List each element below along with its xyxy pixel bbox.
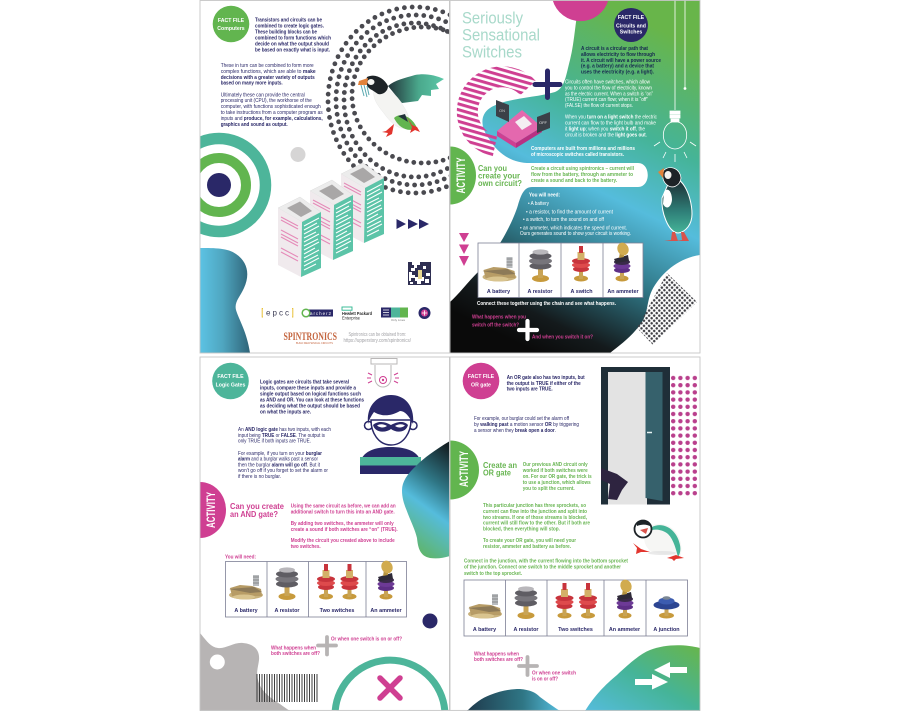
heading: can you create an AND gate [230,501,284,519]
table: components: A switch [571,289,592,295]
text: AND activity: create a sound if both switches are “on” (TRUE). [291,527,398,533]
activity tab green: ACTIVITY [459,451,471,487]
text: connect junction: of the junction. Connect one switch to the middle sprocket and another [464,564,622,570]
text: you will need: • a switch, to turn the sound on and off [523,217,604,223]
page borders [200,0,700,710]
cross pink [380,678,400,698]
text: intro to logic gates: combined to form functions which [255,36,332,42]
panel: page 4 OR gate [450,363,700,711]
text: burglar alarm example [237,451,328,480]
icon: flying puffin [358,74,444,137]
text: activity intro: flow from the battery, through an ammeter to [531,172,634,178]
fact file badge: circuits [614,8,648,42]
panel: page 3 AND gate [200,358,450,711]
fact file badge: circuits: FACT FILE [618,15,645,21]
icon: pink triangles [459,233,469,266]
question: switch off: switch off the switch? [472,322,520,328]
text: switches [565,80,653,109]
text: CPU: to take instructions from a computer program as [221,110,323,116]
question: switch off: What happens when you [472,314,526,320]
heading: create an OR gate: Create an [483,460,517,470]
logo: Spintronics: BUILD MECHANICAL CIRCUITS [296,342,333,345]
logo: Spintronics: SPINTRONICS [284,331,337,343]
text: you will need: Ours generates sound to show your circuit is working. [520,231,631,237]
text: complex functions [221,63,316,86]
question: switch on: And when you switch it on? [532,334,594,340]
logo: epcc: epcc [266,308,289,318]
text: logic gates: as deciding what the output should be based [260,404,360,410]
table: AND components [226,559,406,617]
text: complex functions: complex functions, which are able to make [221,69,316,75]
text: CPU: inputs and produce, for example, calculations, [221,116,323,122]
heading: create an OR gate [483,460,517,478]
text: transistors: Computers are built from millions and millions [531,146,635,152]
text: previous circuit: to use a junction, which allows [523,480,591,486]
fact file badge: circuits: Circuits and [616,24,646,30]
text: CPU: Ultimately these can provide the central [221,92,305,98]
table: OR components: Two switches [558,627,593,633]
text: CPU: graphics and sound as output. [221,122,288,128]
text: light switch: When you turn on a light switch the electric [565,114,657,120]
text: light switch: current can flow to the light bulb and make [565,120,656,126]
icon: standing puffin [658,168,692,241]
text: switches: Circuits often have switches, which allow [565,80,650,86]
activity tab green [450,146,476,204]
text: logic gates [260,380,364,416]
icon: open door with leg [601,367,670,504]
question: one on or off [532,670,577,682]
text: intro to logic gates: be based on exactly what is input. [255,48,330,54]
text: activity intro: Create a circuit using spintronics – current will [531,166,634,172]
text: logic gates: single output based on logical functions such [260,392,362,398]
text: previous circuit: on. For our OR gate, the trick is [523,474,592,480]
logo: partner squares [381,308,408,322]
text: what is a circuit [581,46,661,76]
text: light switch [565,114,657,138]
fact file badge: OR gate: OR gate [471,382,491,388]
grey blob [200,633,290,711]
text: OR example: by walking past a motion sensor OR by triggering [474,422,579,428]
text: light switch: it light up; when you switch it off, the [565,126,645,132]
logo: Hewlett Packard Enterprise: Enterprise [342,316,361,320]
text: you will need: • A battery [528,201,549,207]
logo: archer2 [302,309,333,317]
dotted diamond [637,273,697,345]
dotted ring [326,4,450,196]
logo: crest [418,307,430,319]
table: OR components [464,578,688,636]
fact file badge: computers: Computers [217,26,245,32]
text: switches: (FALSE) the flow of current stops. [565,103,633,109]
question: both off: both switches are off? [474,657,524,663]
text: complex functions: based on many more inputs. [221,80,283,86]
blue blob [200,248,250,353]
text: junction: To create your OR gate, you will need your [483,538,577,544]
text: CPU: processing unit (CPU), the workhorse of the [221,98,312,104]
text: transistors [531,146,635,158]
icon: pink switch box: OFF [539,120,548,125]
plus sign white [519,321,537,339]
title: Seriously [462,8,523,28]
hill: green [585,645,700,711]
text: AND logic gate: An AND logic gate has two inputs, with each [238,427,331,433]
pink circle [553,0,608,21]
text: OR gate: the output is TRUE if either of the [507,381,581,387]
text: CPU: computer, with functions sophisticated enough [221,104,321,110]
fact file badge: computers [213,6,249,42]
text: transistors: of microscopic switches called transistors. [531,152,624,158]
text: AND activity: two switches. [291,544,321,550]
text: AND activity: By adding two switches, the ammeter will only [291,521,394,527]
fact file badge: OR gate [463,363,499,399]
gradient background [450,0,700,353]
table: components: A battery [487,289,510,295]
fact file badge: logic gates: FACT FILE [217,374,244,380]
question: both off [271,646,321,657]
plus sign navy [535,71,560,98]
concentric circles [200,132,272,238]
table: AND components: A battery [234,608,258,614]
text: burglar alarm example: if there is no burglar. [238,474,281,480]
plus sign grey [519,657,537,675]
text: where to obtain: https://upperstory.com/spintronics/ [344,338,411,344]
hill: dark blue [467,689,560,711]
text: junction: two streams. If one of those streams is blocked, [483,515,587,521]
icon: pink switch box: ON [499,108,505,113]
text: logic gates: Logic gates are circuits that take several [260,380,349,386]
text: you will need: You will need: [529,192,560,198]
title: Switches [462,42,522,62]
activity tab green [450,440,479,500]
question: switch off [472,314,526,328]
arrow: right [635,674,668,690]
text: OR example: a sensor when they break open a door. [474,428,556,434]
server towers [278,163,384,277]
text: OR gate: two inputs are TRUE. [507,386,553,392]
text: connect junction: switch to the top sprocket. [464,571,522,577]
text: burglar alarm example: won’t go off if you forget to set the alarm or [237,468,328,474]
heading: can you create your own circuit: own circuit? [478,178,522,188]
activity tab pink [200,482,226,538]
text: burglar alarm example: then the burglar alarm will go off. But it [238,462,320,468]
text: intro to logic gates: combined to create logic gates. [255,24,324,30]
text: junction: current will still flow to the other. But if both are [483,520,590,526]
heading: can you create your own circuit: create your [478,170,521,180]
activity tab green: ACTIVITY [456,157,468,194]
text: intro to logic gates: decide on what the output should [255,42,329,48]
text: logic gates: on what the inputs are. [260,410,311,416]
text: connect: Connect these together using the chain and see what happens. [477,301,616,307]
table: components [478,241,643,298]
text: what is a circuit: allows electricity to flow through [581,52,656,58]
text: junction: blocked, then everything will stop. [483,526,560,532]
text: where to obtain [344,332,411,344]
teal ring [335,660,445,710]
text: intro to logic gates: These building blocks can be [255,30,317,36]
white wave top left [450,0,648,302]
grey dot [290,147,306,162]
text: complex functions: decisions with a greater variety of outputs [221,75,315,81]
table: AND components: A resistor [275,608,300,614]
title [462,12,539,58]
text: switches: you to control the flow of electricity, known [565,86,652,92]
logo: Hewlett Packard Enterprise: Hewlett Packard [342,311,372,316]
striped ring [467,77,528,146]
text: logic gates: inputs, compare these inputs and provide a [260,386,357,392]
question: both off: What happens when [271,646,317,652]
text: AND logic gate [238,427,331,444]
activity tab pink: ACTIVITY [206,492,218,528]
plus sign grey [318,637,336,654]
text: OR example [474,416,579,434]
text: you will need: • a resistor, to find the amount of current [526,210,613,216]
icon: pink switch box [496,100,550,148]
table: OR components: An ammeter [609,627,641,633]
gradient blob right [402,441,450,558]
text: OR example: For example, our burglar could set the alarm off [474,416,569,422]
question: one on or off: Or when one switch is on or off? [331,636,403,642]
text: burglar alarm example: For example, if you turn on your burglar [238,451,323,457]
logo: archer2: archer2 [310,311,331,316]
text: AND activity: Modify the circuit you created above to include [291,538,395,544]
text: intro to logic gates: Transistors and circuits can be [255,18,322,24]
text: what is a circuit: uses the electricity (e.g. a light). [581,70,654,76]
logo: partner squares: Only Lives [391,318,406,322]
text: you will need [520,192,631,237]
text: complex functions: These in turn can be combined to form more [221,63,314,69]
text: burglar alarm example: alarm and a burglar walks past a sensor [238,456,318,462]
label: you will need: You will need: [225,554,256,560]
icon: light bulb [654,0,696,162]
fact file badge: logic gates [212,363,249,399]
text: connect junction: Connect in the junction, with the current flowing into the bottom sprocket [464,558,628,564]
white hole [210,654,225,670]
fact file badge: computers: FACT FILE [218,18,245,24]
text: CPU [221,92,323,128]
table: AND components: An ammeter [370,608,402,614]
panel: page 2 switches [450,0,700,353]
dotted panel pink [670,375,699,497]
fact file badge: OR gate: FACT FILE [468,374,495,380]
text: switches: (TRUE) current can flow; when it is “off” [565,97,648,103]
text: OR gate: An OR gate also has two inputs, but [507,375,585,381]
icon: burglar [360,395,421,474]
panel: page 1 computers [200,4,450,353]
barcode [257,674,317,702]
text: activity intro: create a sound and back to the battery. [531,178,617,184]
title: Sensational [462,26,540,44]
icon: fallen puffin [633,520,684,561]
question: both off: What happens when [474,652,520,658]
text: AND activity: Using the same circuit as before, we can add an [291,504,396,510]
text: what is a circuit: (e.g. a battery) and a device that [581,64,654,70]
icon: security camera [367,358,399,387]
text: where to obtain: Spintronics can be obtained from: [348,332,406,338]
table: OR components: A junction [653,627,680,633]
heading: can you create your own circuit [478,165,522,186]
text: AND activity [291,504,398,550]
text: junction: This particular junction has three sprockets, so [483,503,587,509]
text: junction [483,503,590,550]
text: previous circuit: worked if both switches were [522,468,588,474]
table: components: A resistor [528,289,553,295]
text: junction: current can flow into the junction and split into [483,509,588,515]
text: logic gates: as AND and OR. You can look at these functions [260,398,364,404]
table: AND components: Two switches [320,608,354,614]
fact file badge: logic gates: Logic Gates [216,382,245,388]
text: AND logic gate: only TRUE if both inputs are TRUE. [238,438,311,444]
table: components: An ammeter [607,289,639,295]
question: one on or off: is on or off? [532,676,559,682]
text: switches: as the electric current. When a switch is “on” [565,92,653,98]
text: intro to logic gates [255,18,332,54]
QR code [408,262,431,285]
heading: can you create an AND gate: an AND gate? [230,509,278,519]
table: OR components: A resistor [514,627,539,633]
text: AND activity: additional switch to turn this into an AND gate. [291,510,395,516]
heading: can you create an AND gate: Can you create [230,501,284,511]
text: what is a circuit: A circuit is a circular path that [581,46,648,52]
table: OR components: A battery [473,627,496,633]
heading: can you create your own circuit: Can you [478,163,507,173]
text: you will need: • an ammeter, which indicates the speed of current. [520,226,627,232]
text: junction: resistor, ammeter and battery as before. [483,544,571,550]
arrow: left [654,662,687,678]
logo: Hewlett Packard Enterprise [342,307,372,320]
navy dot [422,614,438,628]
text: OR gate [507,375,585,392]
text: previous circuit: Our previous AND circuit only [523,462,588,468]
question: both off [474,652,524,663]
text: light switch: circuit is broken and the light goes out. [565,132,647,138]
question: both off: both switches are off? [271,651,321,657]
white wave bottom right [610,255,700,353]
fact file badge: circuits: Switches [620,30,642,36]
question: one on or off: Or when one switch [532,670,577,676]
logo: Spintronics [284,332,337,344]
icon: navy triangles [396,219,429,229]
text: previous circuit: you to split the current. [523,486,575,492]
text: AND logic gate: input being TRUE or FALSE. The output is [238,433,325,439]
text: connect junction [464,558,628,577]
heading: create an OR gate: OR gate [483,468,511,478]
text: what is a circuit: it. A circuit will have a power source [581,58,661,64]
text: activity intro [531,166,634,184]
text: previous circuit [522,462,592,492]
